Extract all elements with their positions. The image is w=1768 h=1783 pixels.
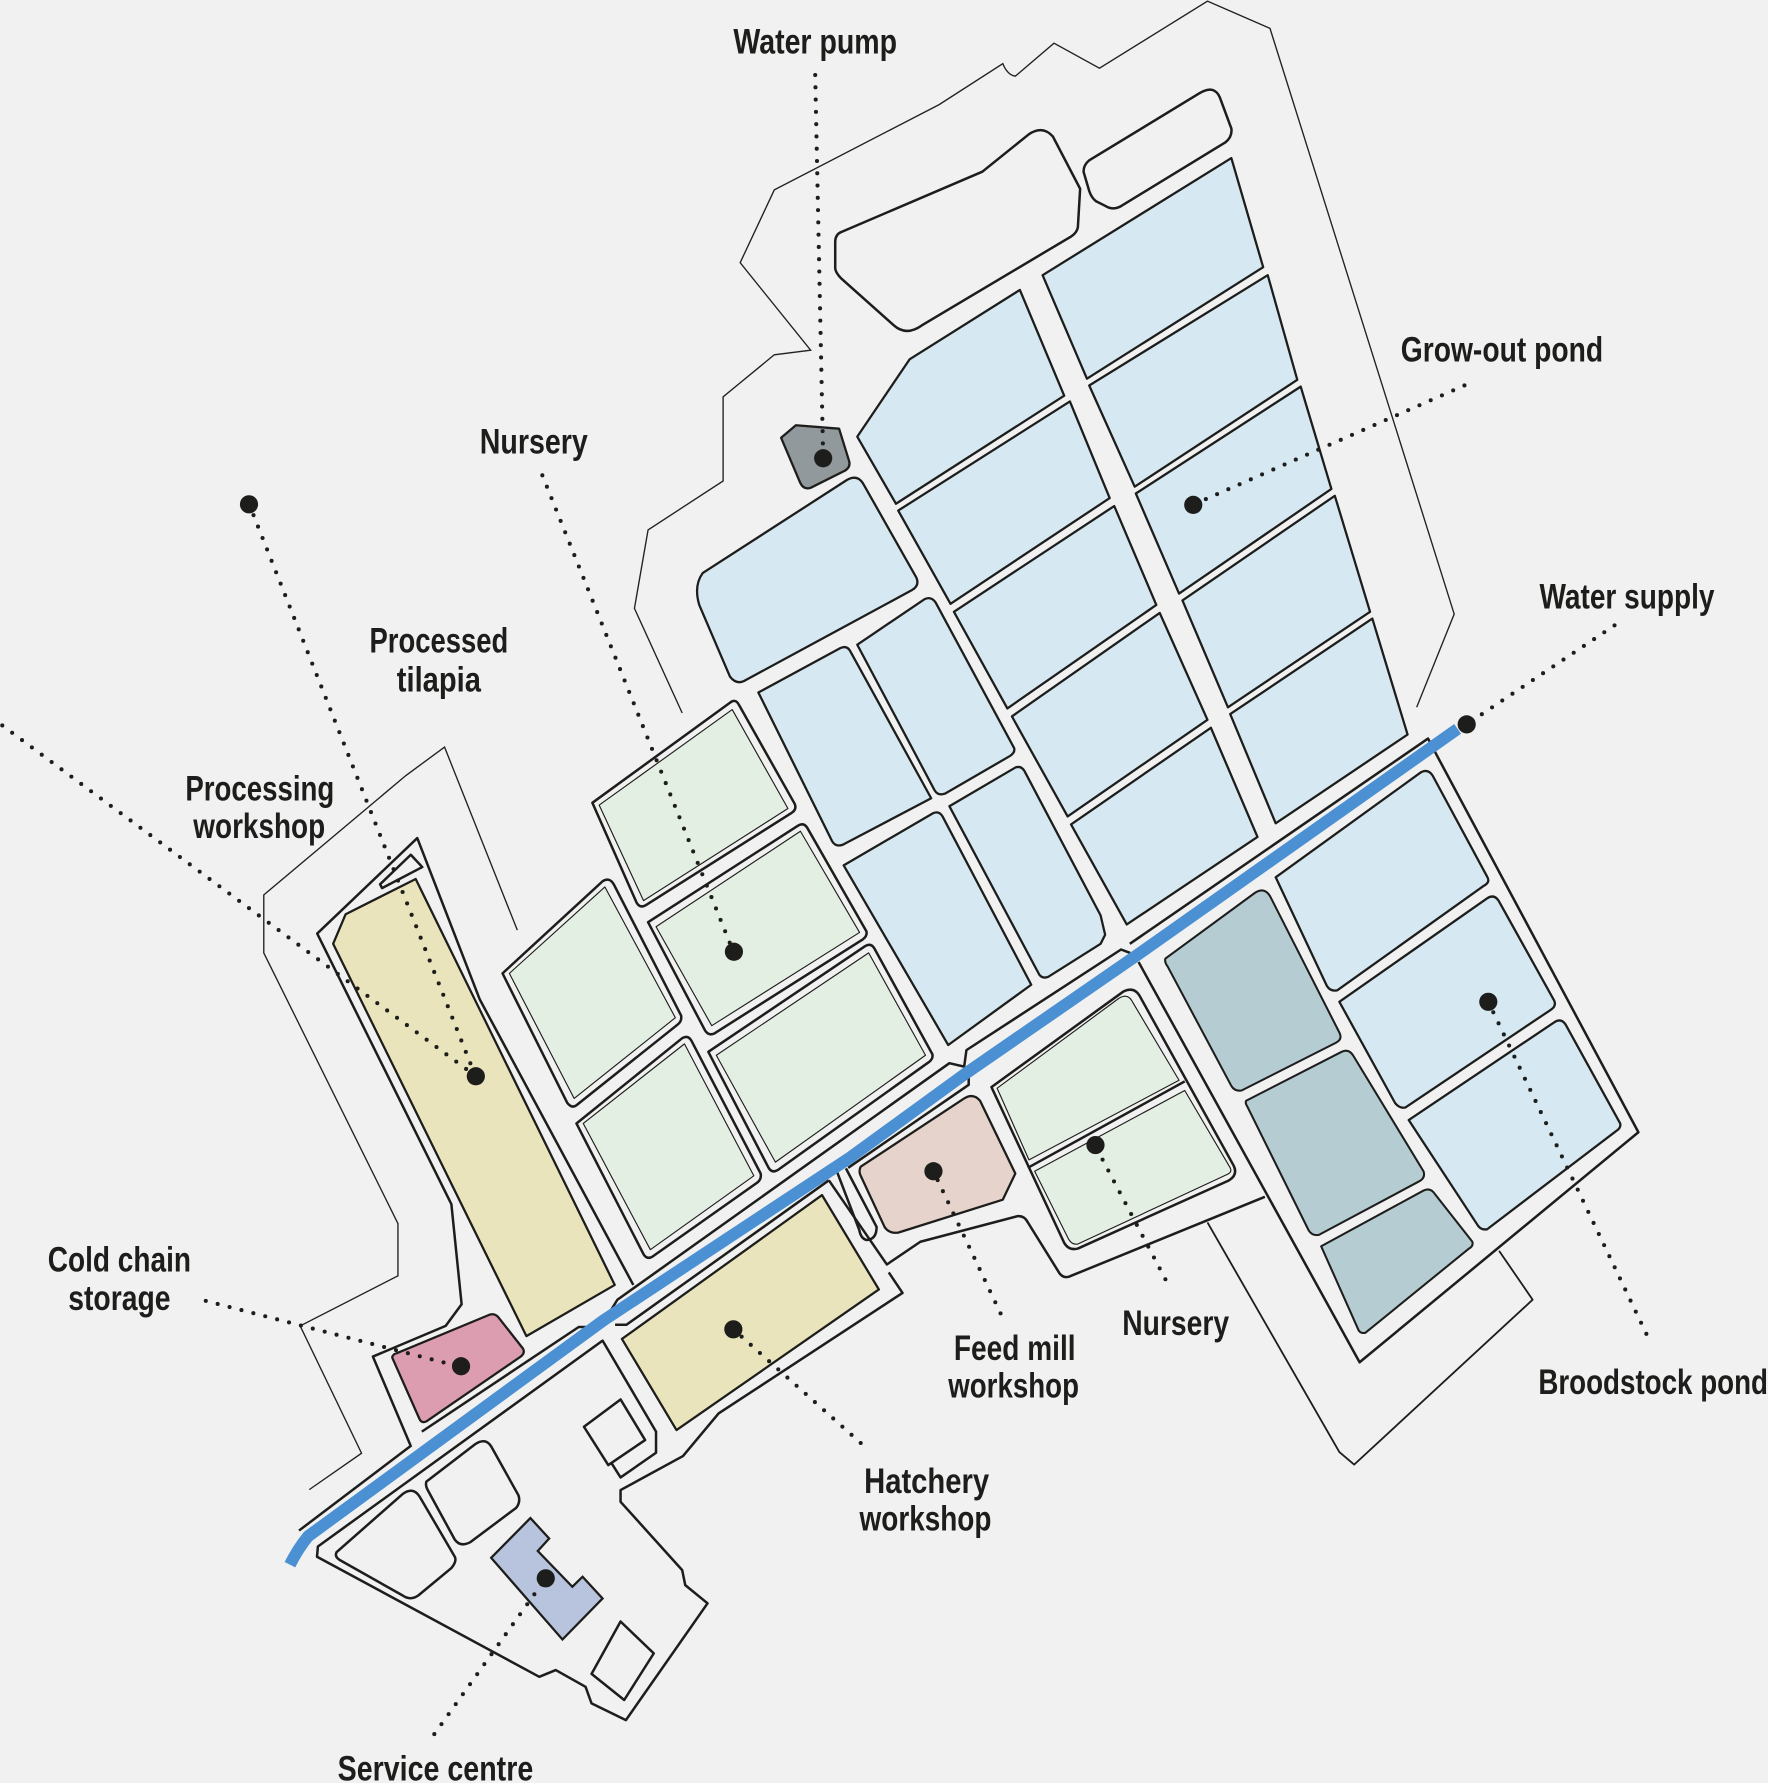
broodstock ponds — [1165, 890, 1473, 1333]
label: processing workshop: Processing — [185, 770, 334, 809]
label: cold chain storage: storage — [68, 1279, 171, 1318]
label: feed mill workshop: workshop — [947, 1367, 1079, 1406]
label: hatchery workshop: Hatchery — [864, 1462, 990, 1501]
label: hatchery workshop — [859, 1462, 991, 1539]
label: cold chain storage: Cold chain — [48, 1240, 191, 1279]
feed mill workshop building — [860, 1096, 1015, 1233]
reservoirs — [835, 90, 1232, 331]
label: water pump: Water pump — [733, 22, 897, 61]
label: nursery upper: Nursery — [480, 423, 588, 462]
grow-out ponds — [697, 158, 1620, 1229]
cold chain storage building — [392, 1314, 524, 1422]
label: processed tilapia: tilapia — [397, 660, 481, 699]
label: hatchery workshop: workshop — [859, 1500, 991, 1539]
label: feed mill workshop: Feed mill — [954, 1329, 1076, 1368]
label: cold chain storage — [48, 1240, 191, 1318]
label: processed tilapia: Processed — [370, 622, 508, 661]
service area plots — [336, 1399, 654, 1700]
processed tilapia / processing workshop building — [333, 879, 615, 1336]
plot outlines and roads — [299, 739, 1638, 1720]
label: grow-out pond: Grow-out pond — [1401, 331, 1603, 370]
nursery ponds — [503, 701, 1235, 1258]
leader end dots — [240, 449, 1497, 1587]
label: feed mill workshop — [947, 1329, 1079, 1406]
label: nursery lower: Nursery — [1122, 1304, 1229, 1343]
outer site boundary lines — [264, 1, 1533, 1490]
label: water supply: Water supply — [1539, 577, 1715, 616]
label: processing workshop — [185, 770, 334, 846]
label: processing workshop: workshop — [192, 807, 325, 846]
service centre building — [491, 1518, 603, 1639]
label: processed tilapia — [370, 622, 508, 699]
water supply canal — [290, 729, 1458, 1565]
hatchery workshop building — [622, 1195, 879, 1430]
icon: water pump building — [781, 425, 850, 488]
